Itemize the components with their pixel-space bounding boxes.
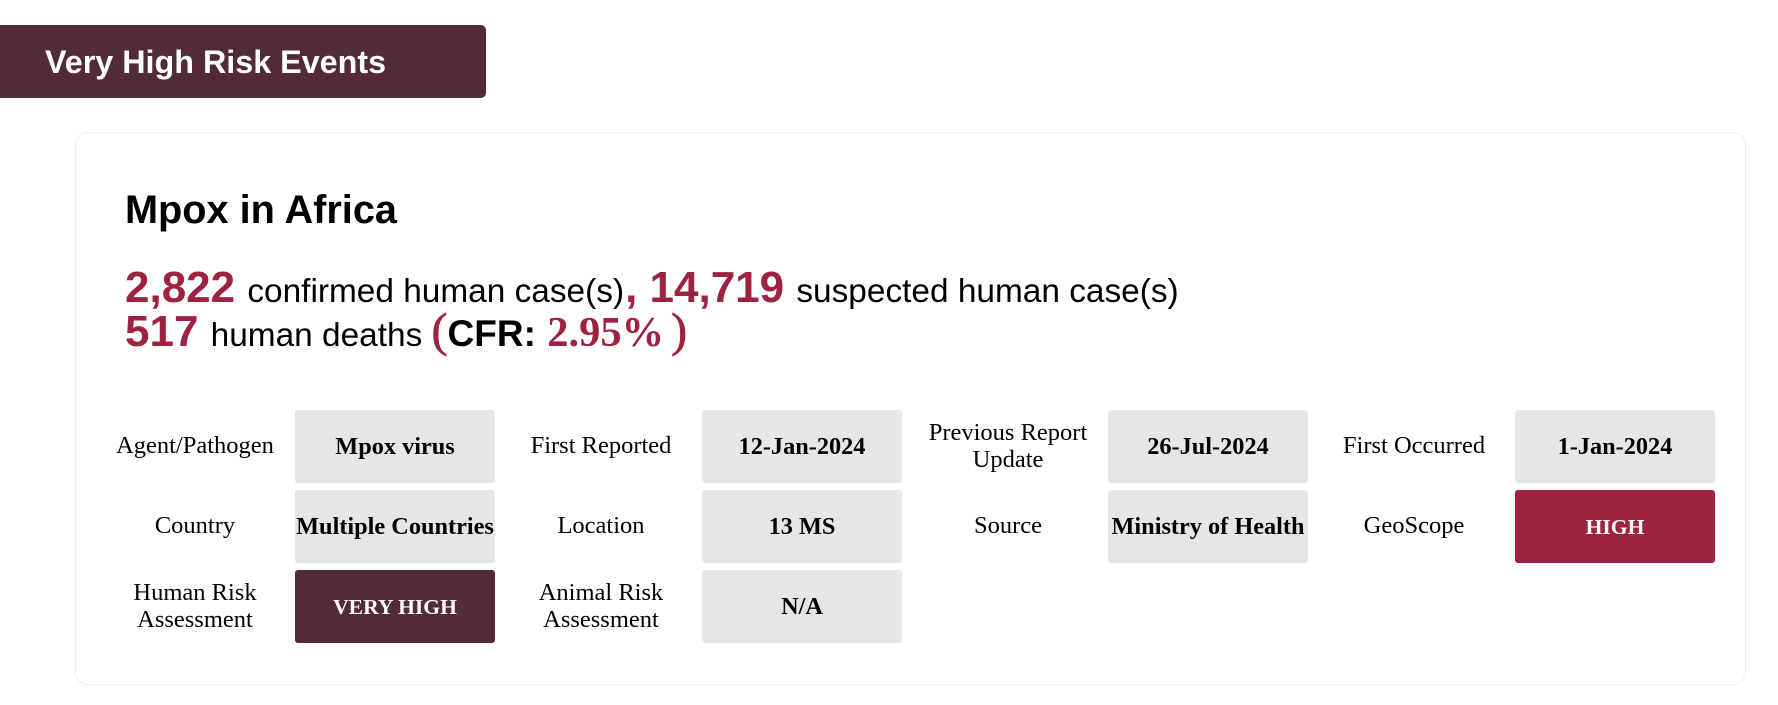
value: 12-Jan-2024 — [702, 410, 902, 483]
value: 1-Jan-2024 — [1515, 410, 1715, 483]
section banner: Very High Risk Events: Very High Risk Events — [45, 44, 386, 80]
label: Agent/Pathogen: Agent/Pathogen — [116, 432, 274, 459]
label: GeoScope: GeoScope — [1364, 512, 1464, 539]
label: Source: Source — [974, 512, 1042, 539]
value: 1-Jan-2024: 1-Jan-2024 — [1558, 433, 1672, 460]
value: VERY HIGH — [295, 570, 495, 643]
value: 13 MS — [702, 490, 902, 563]
value: Mpox virus: Mpox virus — [335, 433, 455, 460]
value: 13 MS: 13 MS — [769, 513, 835, 540]
label: Country: Country — [155, 512, 235, 539]
value: 12-Jan-2024: 12-Jan-2024 — [739, 433, 865, 460]
value: 26-Jul-2024: 26-Jul-2024 — [1147, 433, 1269, 460]
value: Multiple Countries: Multiple Countries — [296, 513, 494, 540]
value: 26-Jul-2024 — [1108, 410, 1308, 483]
value: HIGH — [1515, 490, 1715, 563]
value: HIGH: HIGH — [1586, 514, 1644, 538]
label: Location: Location — [557, 512, 645, 539]
heading: Mpox in Africa: Mpox in Africa — [125, 188, 397, 232]
value: N/A: N/A — [781, 593, 823, 620]
text: deaths and CFR: 517 human deaths (CFR: 2.95%) — [125, 304, 687, 357]
label: Animal Risk Assessment: Animal Risk Assessment — [539, 578, 663, 632]
value: VERY HIGH: VERY HIGH — [333, 594, 457, 618]
value: Multiple Countries — [295, 490, 495, 563]
label: First Reported: First Reported — [531, 432, 671, 459]
value: Mpox virus — [295, 410, 495, 483]
label: First Occurred: First Occurred — [1343, 432, 1485, 459]
value: N/A — [702, 570, 902, 643]
text: case counts: 2,822 confirmed human case(s), 14,719 suspected human case(s) — [125, 263, 1179, 312]
section banner: Very High Risk Events — [0, 25, 486, 98]
label: Previous Report Update: Previous Report Update — [929, 418, 1087, 472]
panel: event card — [75, 132, 1746, 685]
value: Ministry of Health: Ministry of Health — [1112, 513, 1304, 540]
label: Human Risk Assessment: Human Risk Assessment — [133, 578, 257, 632]
value: Ministry of Health — [1108, 490, 1308, 563]
